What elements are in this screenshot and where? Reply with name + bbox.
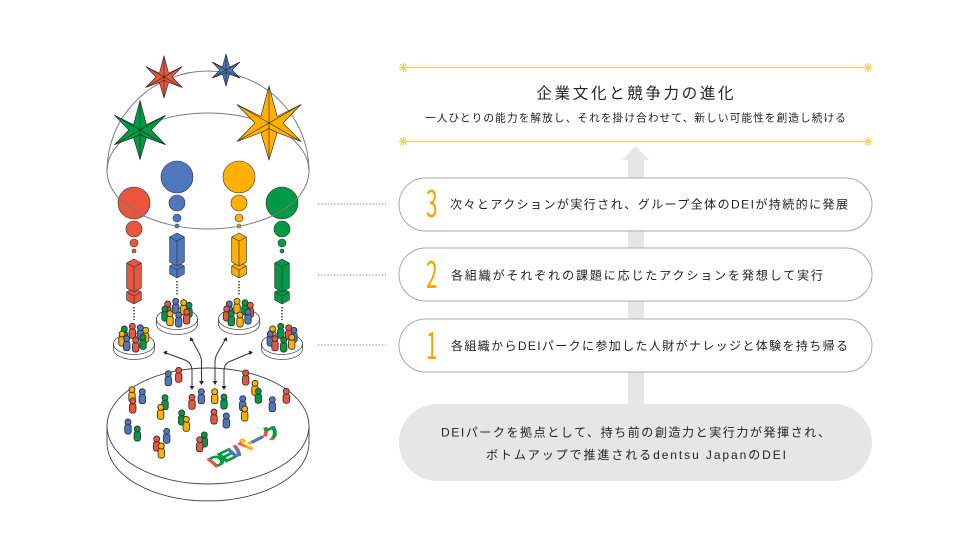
base statement pill	[399, 404, 872, 481]
star: blue	[212, 54, 240, 86]
star: red	[146, 56, 182, 98]
step 3 pill	[399, 174, 872, 231]
subtitle: 一人ひとりの能力を解放し、それを掛け合わせて、新しい可能性を創造し続ける	[425, 112, 846, 124]
group disc: green	[262, 323, 302, 359]
base statement line 2: ボトムアップで推進されるdentsu JapanのDEI	[486, 447, 786, 462]
arrows between park and groups	[163, 337, 253, 390]
idea bubbles: yellow	[223, 161, 255, 228]
star: green	[114, 100, 166, 160]
logo: DEIパーク on disc: DEIパーク	[203, 422, 287, 471]
hierarchy illustration: park, groups, actions and stars	[107, 54, 309, 501]
step 3 text: 次々とアクションが実行され、グループ全体のDEIが持続的に発展	[450, 196, 848, 212]
number 3: 3	[426, 174, 437, 228]
step 1 text: 各組織からDEIパークに参加した人財がナレッジと体験を持ち帰る	[451, 338, 848, 353]
bottom rule with asterisks	[399, 137, 872, 146]
people on main disc	[125, 367, 289, 458]
exclamation block: yellow	[232, 233, 246, 278]
exclamation block: blue	[170, 233, 184, 278]
step 1 pill	[399, 316, 872, 372]
star: yellow	[237, 86, 301, 160]
group disc: yellow	[218, 298, 260, 334]
step 2 pill	[399, 245, 872, 301]
top rule with asterisks	[399, 63, 872, 72]
dome outline	[107, 71, 309, 229]
idea bubbles: blue	[161, 161, 193, 228]
idea bubbles: green	[266, 187, 298, 253]
number 1: 1	[426, 316, 437, 370]
dotted leader lines	[318, 204, 386, 345]
dotted connectors	[134, 281, 282, 320]
idea bubbles: red	[118, 187, 150, 253]
title: 企業文化と競争力の進化	[536, 84, 734, 102]
group disc: blue	[156, 298, 198, 334]
step 2 text: 各組織がそれぞれの課題に応じたアクションを発想して実行	[451, 268, 823, 282]
DEI park main disc	[107, 368, 309, 501]
number 2: 2	[426, 245, 437, 299]
upward arrow	[622, 146, 649, 410]
exclamation block: green	[275, 259, 289, 304]
group disc: red	[114, 323, 154, 359]
base statement line 1: DEIパークを拠点として、持ち前の創造力と実行力が発揮され、	[441, 424, 830, 440]
exclamation block: red	[127, 259, 141, 304]
